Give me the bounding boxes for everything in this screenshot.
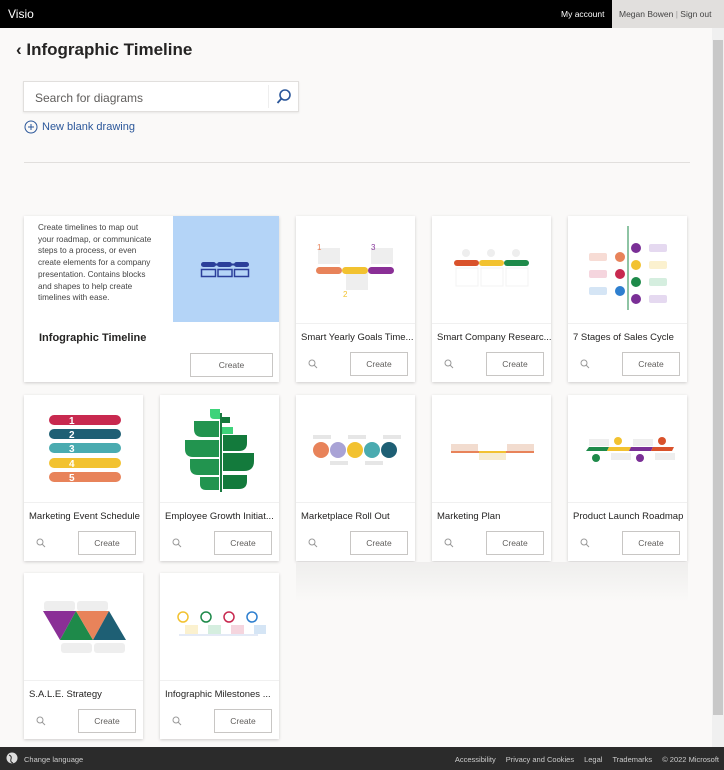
search box: Search for diagrams [35,91,143,105]
card: Marketing Event Schedule: 5 [69,473,75,484]
card: Employee Growth: Create [230,538,256,548]
card: 7 Stages of Sales Cycle [568,216,687,382]
card: Smart Company Research [432,216,551,382]
card: Employee Growth [160,395,279,561]
icon: zoom [36,538,46,548]
card: Marketing Event Schedule: 3 [69,444,75,455]
card: Product Launch Roadmap [568,395,687,561]
card: Marketing Plan: Create [502,538,528,548]
card: Smart Yearly Goals: Smart Yearly Goals Time... [301,332,413,343]
footer links: © 2022 Microsoft [662,755,719,764]
card: Employee Growth: Employee Growth Initiat... [165,511,274,522]
card: Marketing Event Schedule: Marketing Event Schedule [29,511,140,522]
card: Product Launch Roadmap: Product Launch Roadmap [573,511,683,522]
create button [190,353,273,377]
icon: search [276,89,291,104]
footer links: Legal [584,755,602,764]
card: 7 Stages of Sales Cycle: Create [638,359,664,369]
icon: zoom [444,538,454,548]
card: Smart Yearly Goals [296,216,415,382]
footer links: Accessibility [455,755,496,764]
my account: My account [561,9,604,19]
card: Marketing Plan [432,395,551,561]
footer links: Trademarks [612,755,652,764]
card: Marketing Event Schedule: 4 [69,459,75,470]
card: Product Launch Roadmap: Create [638,538,664,548]
card: Infographic Milestones: Create [230,716,256,726]
card: S.A.L.E. Strategy: S.A.L.E. Strategy [29,689,102,700]
card: Marketing Event Schedule: 1 [69,416,75,427]
card: Marketplace Roll Out [296,395,415,561]
card: Marketplace Roll Out: Marketplace Roll Out [301,511,390,522]
card: Infographic Milestones: Infographic Milestones ... [165,689,271,700]
card: Marketplace Roll Out: Create [366,538,392,548]
user area [612,0,724,28]
icon: globe [6,752,18,764]
featured card: Infographic Timeline [24,216,279,382]
card: Infographic Milestones [160,573,279,739]
description: Create timelines to map out your roadmap, or communicate steps to a process, or even create elements for a company presentation. Contains blocks and shapes to help create timelines with ease. [38,223,151,302]
scrollbar [712,28,724,747]
card: Smart Yearly Goals: 2 [343,290,348,299]
icon: zoom [308,538,318,548]
footer links: Privacy and Cookies [506,755,574,764]
card: S.A.L.E. Strategy: Create [94,716,120,726]
create button: Create [219,360,244,370]
card: Marketing Event Schedule [24,395,143,561]
page heading: ‹ Infographic Timeline [16,40,192,59]
card: Smart Yearly Goals: 3 [371,243,376,252]
card: S.A.L.E. Strategy [24,573,143,739]
icon: zoom [444,360,454,368]
icon: zoom [580,360,590,368]
new blank drawing link: New blank drawing [42,121,135,133]
footer links [455,755,719,764]
card: Smart Yearly Goals: 1 [317,243,322,252]
app name: Visio [8,7,34,21]
user area: Megan Bowen | Sign out [619,9,711,19]
top bar [0,0,724,28]
icon: zoom [172,538,182,548]
card: Marketing Event Schedule: Create [94,538,120,548]
footer [0,747,724,770]
card: Smart Yearly Goals: Create [366,359,392,369]
card: Marketing Plan: Marketing Plan [437,511,500,522]
icon: zoom [308,360,318,368]
icon: zoom [580,538,590,548]
footer: Change language [24,755,83,764]
card: Smart Company Research: Create [502,359,528,369]
ghost cards shadow [296,562,688,602]
search box [23,81,299,112]
card: 7 Stages of Sales Cycle: 7 Stages of Sales Cycle [573,332,674,343]
icon: zoom [36,716,46,726]
featured card: Infographic Timeline: Infographic Timeline [39,332,146,344]
icon: zoom [172,716,182,726]
card: Marketing Event Schedule: 2 [69,430,75,441]
card: Smart Company Research: Smart Company Researc... [437,332,552,343]
thumbnail: blue [173,216,279,322]
